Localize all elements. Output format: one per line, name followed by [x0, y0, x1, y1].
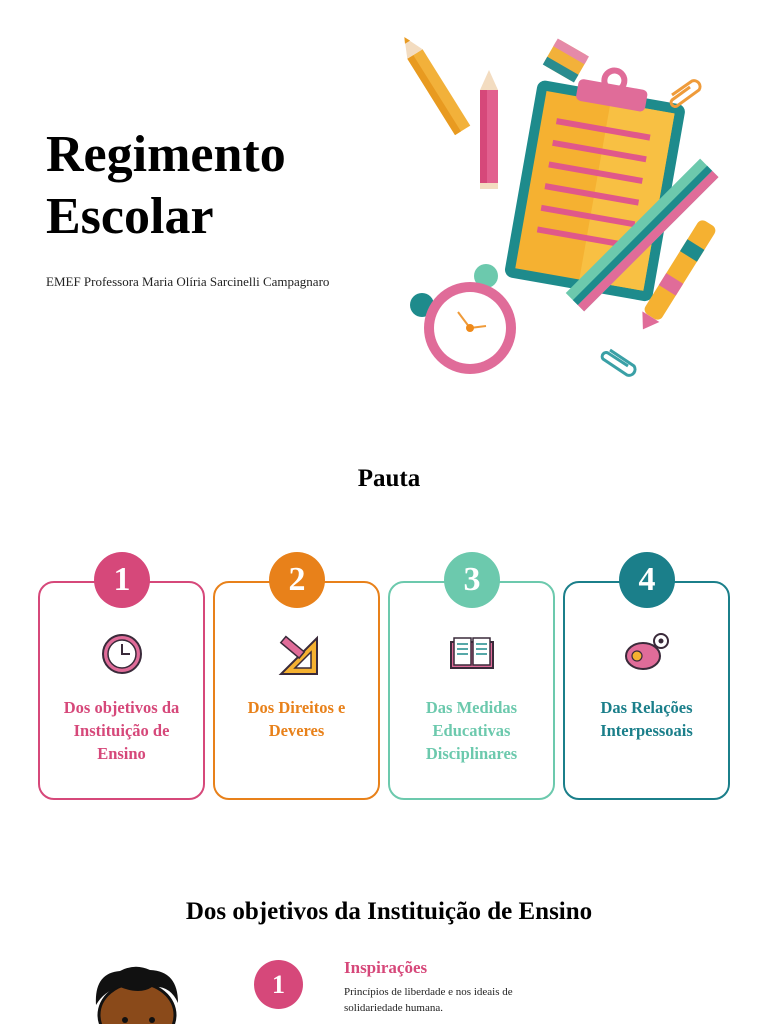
card 3: 3 [464, 561, 480, 598]
clipboard [504, 58, 690, 302]
illustration: child [96, 966, 178, 1024]
title: Regimento [46, 126, 286, 183]
pen [634, 218, 718, 335]
card 2: 2 [288, 561, 306, 598]
card 1: Dos objetivos da Instituição de Ensino [64, 698, 179, 763]
item 1 number: 1 [272, 970, 285, 999]
card 2: Dos Direitos e Deveres [248, 698, 345, 740]
item 1 text: Princípios de liberdade e nos ideais de solidariedade humana. [344, 986, 513, 1014]
paperclips [671, 81, 700, 106]
card 3: Das Medidas Educativas Disciplinares [426, 698, 517, 763]
title [46, 126, 286, 245]
heading: Pauta: Pauta [358, 465, 420, 492]
card 1: 1 [114, 561, 130, 598]
heading: section 2: Dos objetivos da Instituição de Ensino [186, 898, 592, 925]
icon: open book [450, 637, 494, 669]
card 2 [213, 552, 380, 800]
icon: pencil and set square [278, 636, 318, 675]
item 1 text [344, 958, 513, 1014]
card 3 [388, 552, 555, 800]
card 4: 4 [638, 561, 656, 598]
card 4 [563, 552, 730, 800]
icon: brain with gears [625, 633, 669, 670]
yellow pencil [397, 32, 470, 135]
alarm clock [410, 264, 516, 374]
subtitle: EMEF Professora Maria Olíria Sarcinelli Campagnaro [46, 274, 329, 289]
illustration: school supplies [404, 37, 718, 377]
card 4: Das Relações Interpessoais [600, 698, 693, 740]
item 1 text: Inspirações [344, 958, 427, 977]
item 1 number [254, 960, 303, 1009]
title: Escolar [46, 188, 214, 245]
ruler [566, 159, 718, 311]
card 1 [38, 552, 205, 800]
eraser [543, 39, 589, 82]
icon: clock [102, 634, 142, 674]
pink pencil [480, 70, 498, 189]
